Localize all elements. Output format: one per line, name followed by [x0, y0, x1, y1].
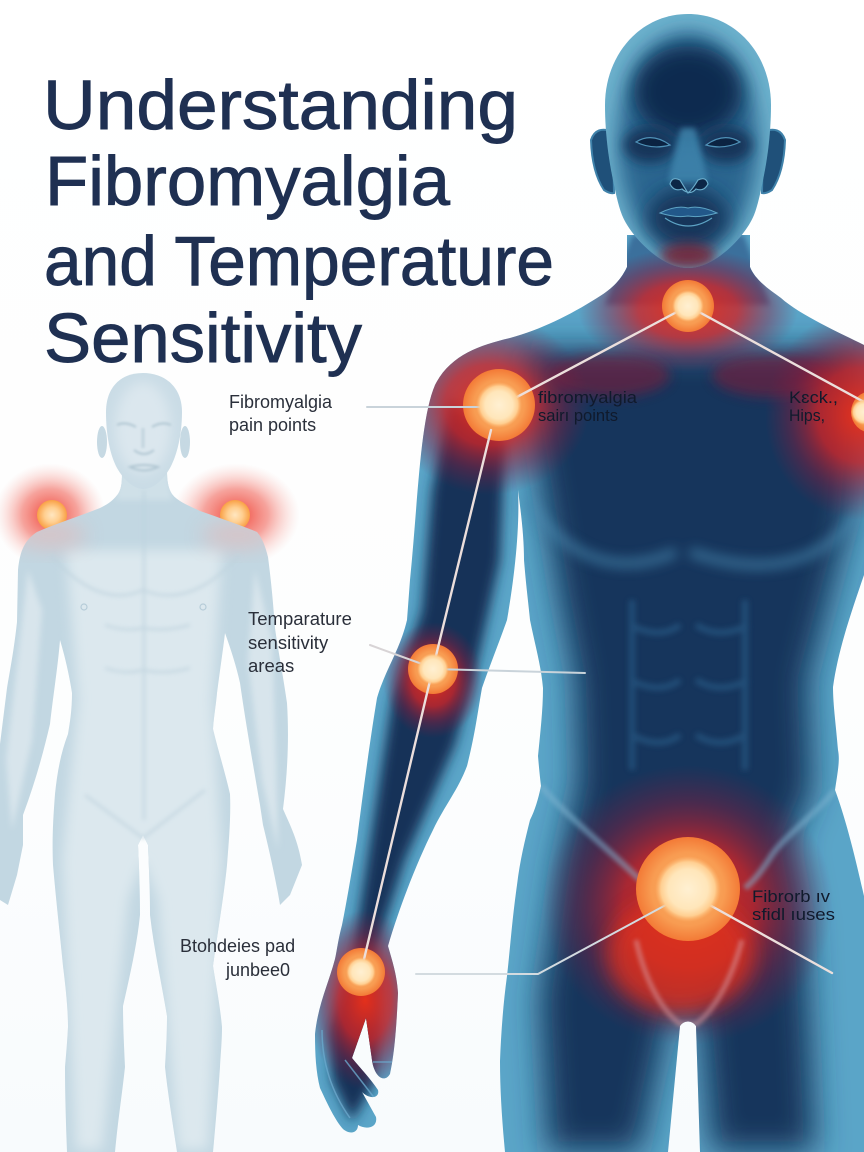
neck shade [605, 235, 770, 305]
label: temperature sensitivity areas: sensitivity [248, 632, 329, 653]
pale nipples [81, 604, 206, 610]
label: neck hips [789, 388, 838, 425]
body silhouette with shading [300, 200, 864, 1152]
pain point cores [346, 290, 864, 987]
label: neck hips: Hips, [789, 406, 825, 425]
label: bottom left: Btohdeies pad [180, 936, 295, 956]
label: on-body hip [752, 887, 835, 924]
hip crease highlights [541, 786, 835, 888]
pale anatomy lines [50, 490, 240, 838]
label: on-body fibromyalgia [538, 388, 638, 425]
red glow zones [307, 248, 864, 1090]
pale neck shade [118, 474, 170, 499]
label: temperature sensitivity areas: areas [248, 655, 294, 676]
title [43, 66, 554, 377]
pale body silhouette [0, 473, 302, 1152]
label: fibromyalgia pain points: Fibromyalgia [229, 392, 332, 412]
pain point discs [337, 280, 864, 996]
pale head [106, 373, 182, 489]
pale pain point left [37, 500, 67, 530]
title: Fibromyalgia [45, 142, 450, 220]
figure: pale background body [0, 373, 302, 1152]
groin rim [636, 940, 742, 1024]
abdominal muscles [630, 600, 748, 770]
connector lines [361, 306, 864, 974]
face: mouth [660, 207, 717, 217]
face: nose bridge [668, 128, 708, 182]
label: fibromyalgia pain points: pain points [229, 415, 316, 435]
title: and Temperature [44, 222, 554, 300]
arm dark interior [330, 400, 505, 1122]
label: on-body hip: sfidl ıuses [752, 905, 835, 924]
pale arm highlights [6, 570, 278, 850]
pale pain point right [220, 500, 250, 530]
face: eyes [636, 138, 740, 147]
red glow behind pale shoulders [0, 463, 300, 567]
midline [684, 440, 692, 790]
label: bottom left: junbee0 [225, 960, 290, 980]
figure: dark blue front body [300, 10, 864, 1152]
pale face [117, 423, 171, 470]
torso dark interior [520, 350, 864, 1152]
hand highlights [322, 1030, 392, 1118]
title: Understanding [43, 66, 518, 144]
pale head highlight [115, 382, 171, 474]
pale torso highlight [62, 550, 222, 1150]
label: on-body fibromyalgia: sairı points [538, 406, 618, 425]
face: nose [670, 179, 708, 193]
label: temperature sensitivity areas: Temparature [248, 608, 352, 629]
title: Sensitivity [44, 299, 362, 377]
label: neck hips: Kɛck., [789, 388, 838, 407]
pale ears [97, 426, 190, 458]
pale pink tint [14, 521, 274, 549]
head [600, 10, 776, 272]
pec lower highlight [544, 518, 850, 575]
label: on-body hip: Fibrorb ıv [752, 887, 831, 906]
label: on-body fibromyalgia: fibromyalgia [538, 388, 638, 407]
ears [591, 130, 785, 193]
